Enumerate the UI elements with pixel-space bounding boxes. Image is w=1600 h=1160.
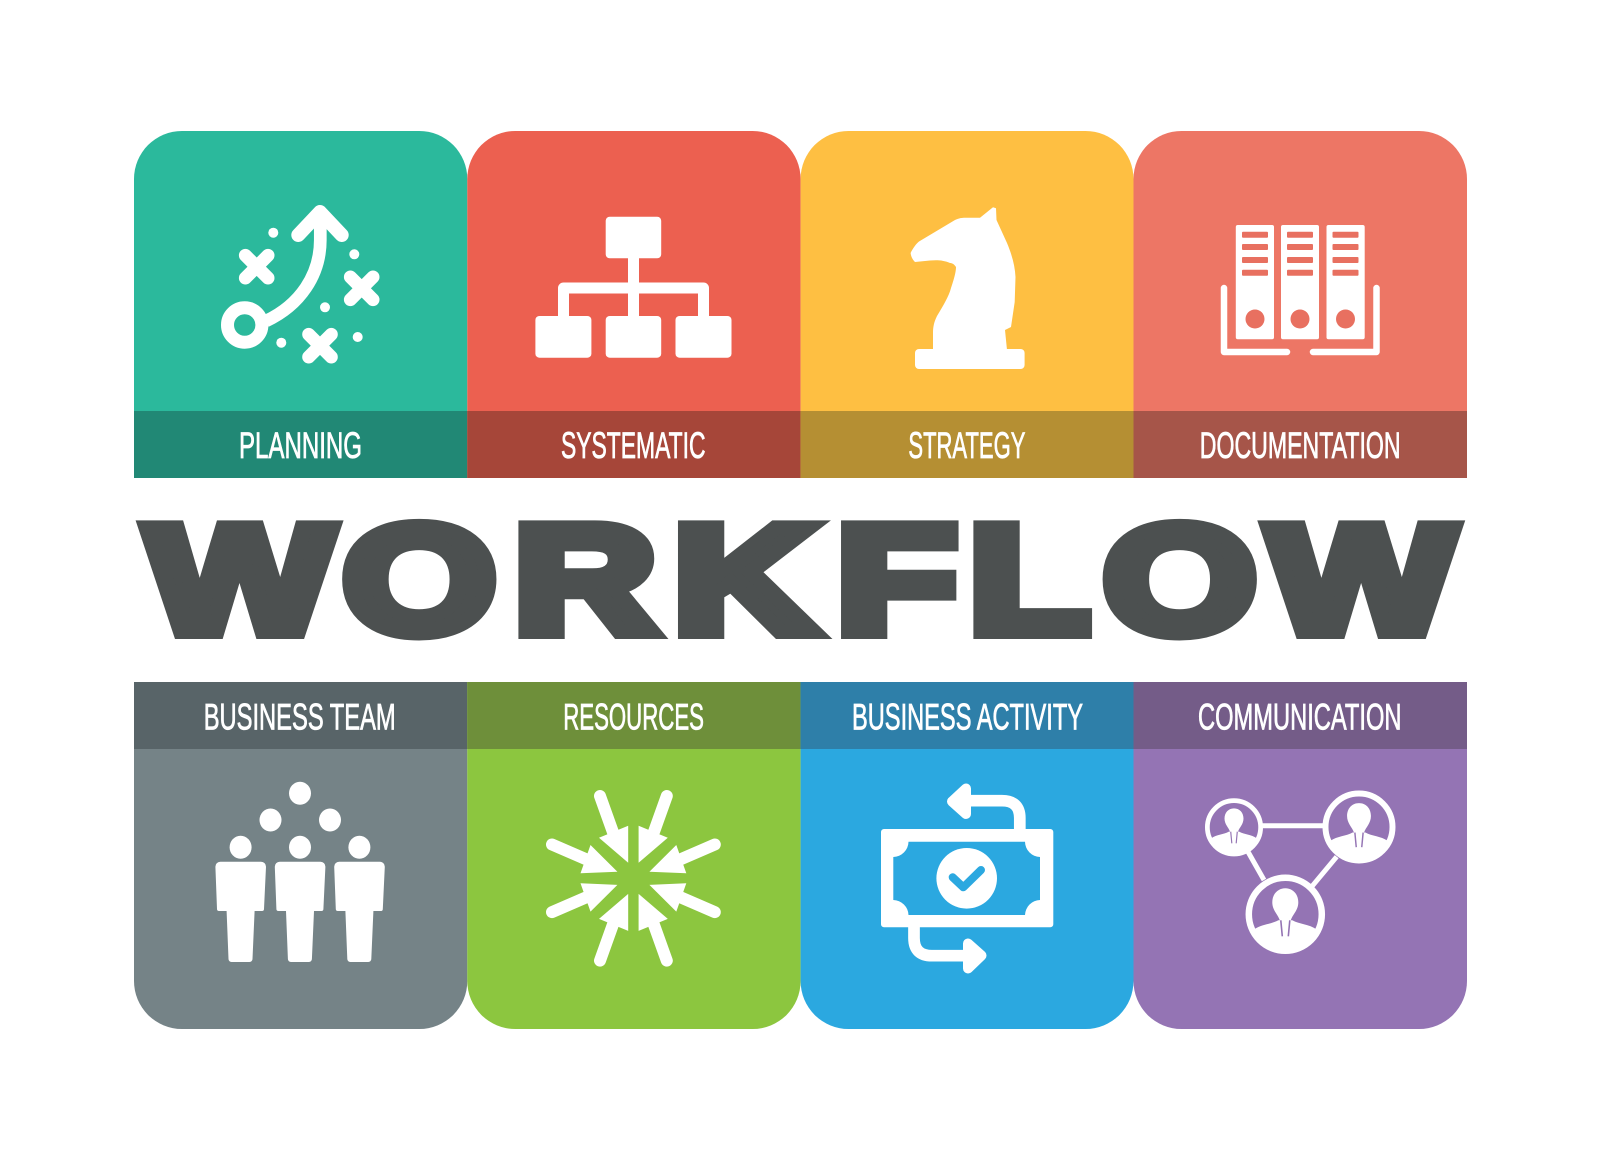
- icon: connected people: [1207, 793, 1393, 951]
- panel: systematic: [467, 131, 801, 478]
- icon: banknote with cycle arrows: [881, 788, 1053, 968]
- panel: strategy: [801, 131, 1134, 478]
- label: systematic: SYSTEMATIC: [561, 425, 706, 466]
- panel: communication: [1134, 682, 1467, 1029]
- panel: resources: [467, 682, 801, 1029]
- panel: documentation: [1134, 131, 1467, 478]
- icon: play diagram with arrow: [228, 212, 373, 357]
- panel: business activity: [801, 682, 1134, 1029]
- panel: business team: [134, 682, 467, 1029]
- icon: binders on shelf: [1224, 225, 1376, 352]
- label: business activity: BUSINESS ACTIVITY: [852, 696, 1083, 737]
- panel: planning: [134, 131, 467, 478]
- icon: team of people: [215, 782, 385, 962]
- label: planning: PLANNING: [239, 425, 362, 466]
- icon: hierarchy chart: [535, 217, 732, 358]
- label: communication: COMMUNICATION: [1198, 696, 1402, 737]
- label: resources: RESOURCES: [563, 696, 704, 737]
- label: business team: BUSINESS TEAM: [204, 696, 396, 737]
- icon: chess knight: [911, 207, 1025, 369]
- label: strategy: STRATEGY: [908, 425, 1025, 466]
- label: documentation: DOCUMENTATION: [1200, 425, 1401, 466]
- title: WORKFLOW: WORKFLOW: [147, 495, 1454, 665]
- icon: converging arrows: [552, 796, 715, 961]
